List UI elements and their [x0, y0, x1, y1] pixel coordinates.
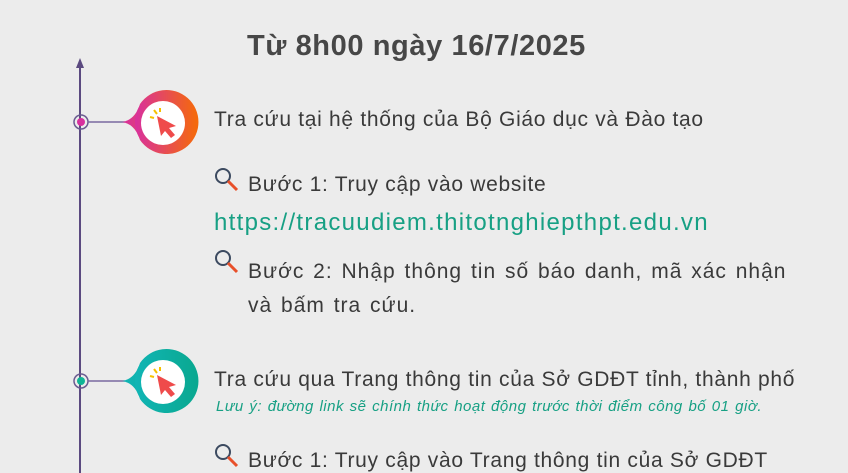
text: step 1: Bước 1: Truy cập vào website [248, 173, 546, 196]
note: Lưu ý: đường link sẽ chính thức hoạt động trước thời điểm công bố 01 giờ. [216, 398, 762, 415]
marker 1 [74, 90, 198, 154]
text: step 2: và bấm tra cứu. [248, 294, 416, 317]
text: section 1 heading: Tra cứu tại hệ thống của Bộ Giáo dục và Đào tạo [214, 108, 704, 131]
text: step 2 [248, 260, 786, 317]
text: section 2 step 1: Bước 1: Truy cập vào Trang thông tin của Sở GDĐT [248, 449, 768, 472]
timeline line [76, 58, 84, 473]
search icons [216, 169, 237, 466]
text: step 2: Bước 2: Nhập thông tin số báo danh, mã xác nhận [248, 260, 786, 283]
link: https://tracuudiem.thitotnghiepthpt.edu.vn [214, 209, 709, 236]
marker 2 [74, 349, 198, 413]
text: section 2 heading: Tra cứu qua Trang thông tin của Sở GDĐT tỉnh, thành phố [214, 368, 795, 391]
title: Từ 8h00 ngày 16/7/2025 [247, 30, 586, 62]
